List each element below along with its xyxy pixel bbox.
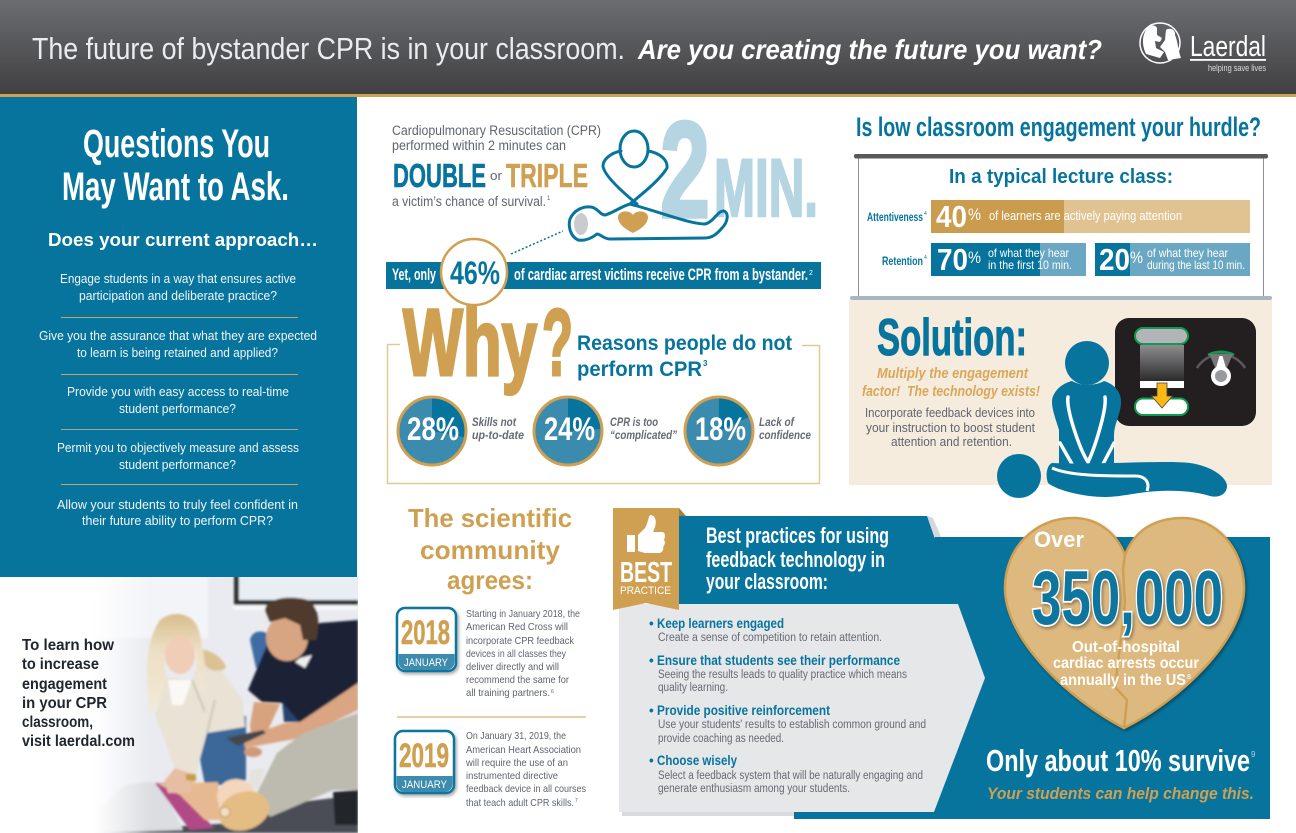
retention bars: 4 xyxy=(924,255,927,261)
text: 2019 American Heart Association: 7 xyxy=(575,798,578,804)
calendar icon: 2019 January: JANUARY xyxy=(402,779,448,791)
panel: 350,000 statistic background xyxy=(794,537,1270,819)
text: 2018 Red Cross: recommend the same for xyxy=(466,674,569,686)
practice: positive reinforcement: Provide positive reinforcement xyxy=(657,703,830,718)
practice: keep learners engaged xyxy=(649,616,882,644)
pie: 28 percent skills not up to date: Skills not xyxy=(472,417,517,429)
reasons heading: 3 xyxy=(703,359,708,368)
practice: choose wisely: • xyxy=(649,753,654,768)
double or triple: or xyxy=(490,168,503,183)
panel: questions you may want to ask xyxy=(0,97,357,577)
text: 2019 American Heart Association xyxy=(465,730,586,809)
section: low classroom engagement xyxy=(850,112,1272,300)
practice: choose wisely: Choose wisely xyxy=(657,753,737,768)
call to action text: visit laerdal.com xyxy=(22,733,135,750)
question list: to learn is being retained and applied? xyxy=(77,345,278,360)
retention first 10 minutes: in the first 10 min. xyxy=(988,258,1072,272)
section heading: community xyxy=(420,535,561,565)
retention bars: Retention xyxy=(882,254,923,268)
screen frame xyxy=(850,154,1272,300)
banner: 46 percent xyxy=(386,239,821,305)
practice: ensure students see performance: • xyxy=(649,653,654,668)
attentiveness bar: % xyxy=(968,205,981,224)
section heading: agrees: xyxy=(447,565,533,595)
panel heading: Questions You xyxy=(83,122,270,166)
solution description: Incorporate feedback devices into xyxy=(865,405,1035,420)
double or triple: TRIPLE xyxy=(506,157,588,194)
infographic: broken heart statistic: Over xyxy=(1034,527,1084,552)
heading banner xyxy=(678,516,958,604)
text: 2018 Red Cross: 6 xyxy=(551,689,554,695)
panel: best practices: your classroom: xyxy=(706,569,828,594)
reasons heading: Reasons people do not xyxy=(577,332,792,355)
reasons heading: perform CPR xyxy=(577,358,702,381)
pie: 24 percent CPR is too complicated: “complicated” xyxy=(610,430,677,442)
panel: best practices: feedback technology in xyxy=(706,547,885,572)
heart caption xyxy=(1053,639,1199,689)
reasons heading xyxy=(577,332,792,381)
question list: Engage students in a way that ensures active xyxy=(60,271,296,286)
heart caption: 8 xyxy=(1187,674,1191,681)
section: why people do not perform CPR xyxy=(388,290,820,484)
panel heading xyxy=(62,122,289,209)
lecture class heading: In a typical lecture class: xyxy=(949,166,1173,188)
section: 2 minute CPR fact xyxy=(386,94,821,305)
photo panel: instructor and learner practising CPR xyxy=(0,570,358,833)
heart caption: cardiac arrests occur xyxy=(1053,655,1199,672)
attentiveness bar: Attentiveness xyxy=(867,210,923,224)
practice: ensure students see performance xyxy=(649,653,907,694)
infographic: broken heart statistic xyxy=(986,518,1256,803)
intro text xyxy=(392,123,601,209)
heart caption: Out-of-hospital xyxy=(1072,639,1180,656)
call to action text: classroom, xyxy=(22,714,93,731)
call to action text xyxy=(22,637,135,750)
banner: 46 percent: of cardiac arrest victims receive CPR from a bystander. xyxy=(514,265,808,284)
best practice ribbon: PRACTICE xyxy=(620,585,671,597)
Laerdal logo xyxy=(1140,23,1266,74)
practice: keep learners engaged: Create a sense of competition to retain attention. xyxy=(658,632,882,644)
text: 2018 Red Cross: incorporate CPR feedback xyxy=(466,635,575,647)
big 2 MIN graphic: 2 xyxy=(660,94,710,247)
intro text: performed within 2 minutes can xyxy=(392,138,566,153)
practice: ensure students see performance: Seeing the results leads to quality practice which means xyxy=(658,669,907,681)
panel heading: May Want to Ask. xyxy=(62,165,289,209)
header title: Are you creating the future you want? xyxy=(637,34,1102,65)
retention first 10 minutes: of what they hear xyxy=(988,246,1069,260)
text: 2018 Red Cross xyxy=(466,608,580,699)
feedback device screen xyxy=(1115,318,1256,426)
solution heading: Solution: xyxy=(877,309,1027,367)
retention bars xyxy=(882,242,1250,277)
section heading xyxy=(408,503,572,595)
banner: 46 percent: 46% xyxy=(450,255,500,291)
pie: 18 percent lack of confidence: Lack of xyxy=(759,417,795,429)
attentiveness bar: 40 xyxy=(936,199,967,234)
practice: choose wisely: generate enthusiasm among your students. xyxy=(658,783,850,795)
text: 2018 Red Cross: all training partners. xyxy=(466,687,550,699)
text: 2019 American Heart Association: that teach adult CPR skills. xyxy=(466,797,574,809)
section: the scientific community agrees xyxy=(395,503,586,809)
pie: 24 percent CPR is too complicated xyxy=(534,397,677,465)
text: 2019 American Heart Association: instrumented directive xyxy=(466,770,558,782)
big 2 MIN graphic xyxy=(660,94,818,247)
practice: positive reinforcement xyxy=(649,703,926,745)
panel subheading: Does your current approach… xyxy=(48,229,318,250)
question list: Provide you with easy access to real-time xyxy=(67,384,289,399)
retention last 10 minutes: of what they hear xyxy=(1147,246,1228,260)
calendar icon: 2019 January xyxy=(395,731,454,793)
retention first 10 minutes: 70 xyxy=(937,242,968,277)
Laerdal logo: Laerdal xyxy=(1190,31,1266,63)
section heading: The scientific xyxy=(408,503,572,533)
pie: 24 percent CPR is too complicated: CPR is too xyxy=(610,417,658,429)
call to action text: engagement xyxy=(22,676,107,693)
practice: ensure students see performance: Ensure that students see their performance xyxy=(657,653,900,668)
banner: 46 percent: 2 xyxy=(809,270,813,277)
solution description xyxy=(865,405,1035,449)
attentiveness bar xyxy=(867,199,1250,234)
practice: positive reinforcement: • xyxy=(649,703,654,718)
question list: Allow your students to truly feel confident in xyxy=(57,497,298,512)
practice: positive reinforcement: Use your students' results to establish common ground and xyxy=(658,719,926,731)
Why heading: Why xyxy=(403,290,537,396)
big 2 MIN graphic: MIN. xyxy=(714,143,818,234)
solution description: your instruction to boost student xyxy=(866,420,1035,435)
text: 2019 American Heart Association: American Heart Association xyxy=(466,744,581,756)
frame xyxy=(388,344,820,484)
question list: Permit you to objectively measure and assess xyxy=(57,440,299,455)
pie: 24 percent CPR is too complicated: 24% xyxy=(544,411,595,447)
retention last 10 minutes: 20 xyxy=(1099,242,1130,277)
question list: student performance? xyxy=(119,457,236,472)
solution tagline: Multiply the engagement xyxy=(877,365,1029,382)
Why heading: ? xyxy=(542,290,573,396)
question list xyxy=(39,271,317,528)
calendar icon: 2018 January: 2018 xyxy=(401,614,450,652)
calendar icon: 2018 January xyxy=(397,608,456,671)
panel: solution xyxy=(849,300,1272,498)
header banner xyxy=(0,0,1296,97)
pie: 18 percent lack of confidence xyxy=(685,397,812,465)
text: 2018 Red Cross: American Red Cross will xyxy=(466,621,568,633)
icon: rescuer and patient xyxy=(997,341,1227,498)
pie: 28 percent skills not up to date: up-to-date xyxy=(472,430,525,442)
panel: best practices xyxy=(613,508,985,816)
call to change: Your students can help change this. xyxy=(987,784,1254,803)
retention last 10 minutes xyxy=(1095,242,1250,277)
solution tagline: factor! The technology exists! xyxy=(862,383,1040,400)
icon: thumbs up xyxy=(627,515,665,553)
header title xyxy=(32,31,1102,66)
attentiveness bar: 4 xyxy=(924,211,927,217)
text: 2018 Red Cross: Starting in January 2018, the xyxy=(466,608,580,620)
calendar icon: 2018 January: JANUARY xyxy=(404,657,449,669)
practice: keep learners engaged: Keep learners engaged xyxy=(657,616,784,631)
best practice ribbon xyxy=(613,508,686,610)
practice: positive reinforcement: provide coaching as needed. xyxy=(658,733,784,745)
practice: ensure students see performance: quality learning. xyxy=(658,682,728,694)
banner: 46 percent: Yet, only xyxy=(392,265,436,284)
attentiveness bar: of learners are actively paying attention xyxy=(989,209,1182,223)
practice: keep learners engaged: • xyxy=(649,616,654,631)
question list: Give you the assurance that what they are expected xyxy=(39,328,317,343)
pie: 28 percent skills not up to date xyxy=(398,397,525,465)
pie: 18 percent lack of confidence: confidence xyxy=(759,430,812,442)
icon: CPR outline figure xyxy=(569,131,727,240)
pie: 28 percent skills not up to date: 28% xyxy=(407,411,459,447)
pie: 18 percent lack of confidence: 18% xyxy=(695,411,746,447)
question list: student performance? xyxy=(119,401,236,416)
retention last 10 minutes: during the last 10 min. xyxy=(1147,258,1245,272)
best practice ribbon: BEST xyxy=(620,557,672,589)
text: 2018 Red Cross: deliver directly and will xyxy=(466,661,559,673)
retention last 10 minutes: % xyxy=(1130,248,1143,267)
solution tagline xyxy=(862,365,1040,400)
Laerdal logo: helping save lives xyxy=(1208,63,1266,74)
retention first 10 minutes xyxy=(931,242,1086,277)
intro text: a victim’s chance of survival. xyxy=(392,194,546,209)
call to action text: To learn how xyxy=(22,637,115,654)
header title: The future of bystander CPR is in your classroom. xyxy=(32,31,625,66)
text: 2018 Red Cross: devices in all classes they xyxy=(466,648,567,660)
practice: choose wisely xyxy=(649,753,923,795)
text: 2019 American Heart Association: On January 31, 2019, the xyxy=(466,730,566,742)
call to action text: to increase xyxy=(22,656,99,673)
dotted callout line xyxy=(511,231,563,254)
double or triple: DOUBLE xyxy=(393,157,486,194)
heart caption: annually in the US xyxy=(1060,672,1186,689)
retention first 10 minutes: % xyxy=(968,248,981,267)
call to action text: in your CPR xyxy=(22,695,107,712)
solution description: attention and retention. xyxy=(891,434,1012,449)
survival statement: 9 xyxy=(1251,750,1256,759)
icon: broken heart xyxy=(1005,518,1244,728)
text: 2019 American Heart Association: feedback device in all courses xyxy=(466,783,586,795)
intro text: 1 xyxy=(547,196,551,202)
practice: choose wisely: Select a feedback system that will be naturally engaging and xyxy=(658,770,923,782)
intro text: Cardiopulmonary Resuscitation (CPR) xyxy=(392,123,601,138)
calendar icon: 2019 January: 2019 xyxy=(399,737,449,775)
question list: participation and deliberate practice? xyxy=(79,288,277,303)
text: 2019 American Heart Association: will require the use of an xyxy=(465,757,568,769)
panel: best practices: Best practices for using xyxy=(706,523,889,548)
question list: their future ability to perform CPR? xyxy=(82,513,273,528)
